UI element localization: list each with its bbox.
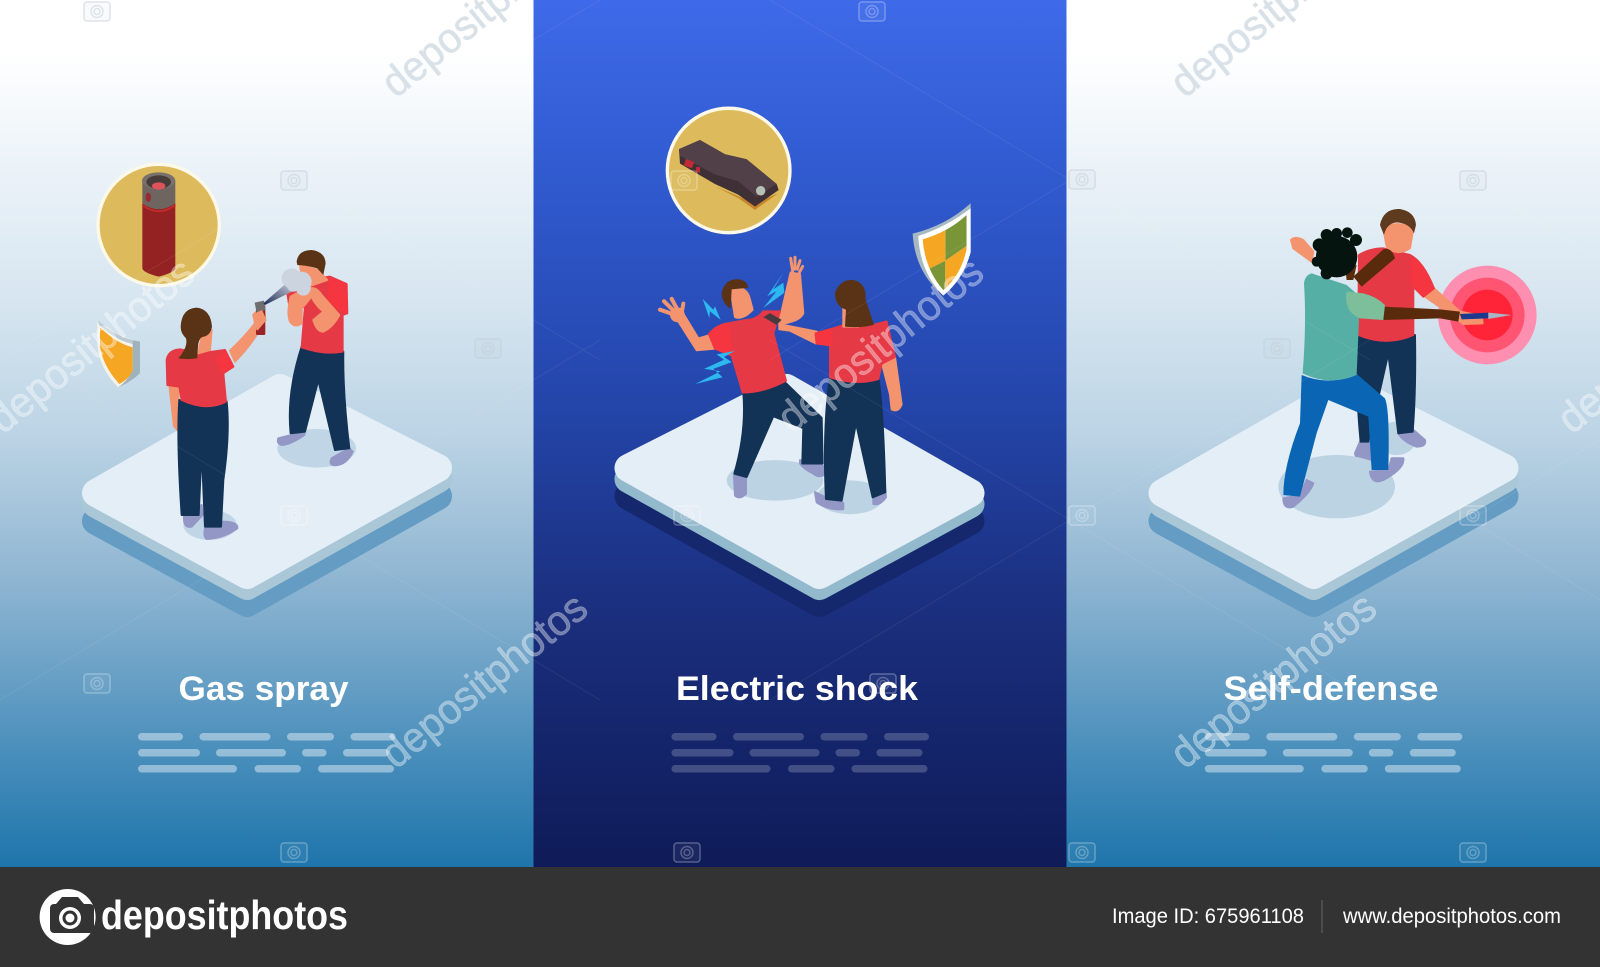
watermark overlay: depositphotos	[372, 583, 596, 777]
image id: Image ID: 675961108	[1112, 905, 1304, 928]
heading: gas spray: Gas spray	[178, 670, 349, 708]
platform	[628, 388, 970, 603]
platform	[1162, 388, 1504, 603]
text placeholder lines	[1205, 733, 1462, 772]
watermark overlay: depositphotos	[768, 247, 992, 441]
footer bar	[0, 867, 1600, 967]
woman with spray	[167, 301, 265, 540]
logo: wordmark: depositphotos	[101, 892, 348, 938]
website url: www.depositphotos.com	[1342, 905, 1561, 928]
icon: knife	[1460, 313, 1512, 319]
logo: camera badge	[40, 889, 96, 945]
man defending	[1291, 209, 1483, 462]
icon: checkered shield	[913, 203, 971, 296]
woman with stun gun	[763, 280, 902, 514]
man sprayed	[263, 250, 356, 468]
heading: electric shock: Electric shock	[676, 670, 918, 708]
watermark overlay: depositphotos	[1161, 583, 1385, 777]
heading: self-defense: Self-defense	[1224, 670, 1438, 708]
panel: self-defense	[1066, 0, 1600, 867]
icon: spray can in gold circle	[98, 164, 219, 286]
panel: electric shock	[534, 0, 1066, 867]
icon: orange shield	[97, 320, 140, 387]
panel: gas spray	[0, 0, 534, 867]
attacker restrained	[1278, 227, 1460, 518]
platform	[96, 388, 438, 603]
electric shock scene	[660, 108, 971, 514]
gas spray scene	[97, 164, 356, 540]
self-defense scene	[1278, 209, 1537, 518]
man shocked	[660, 257, 826, 501]
icon: pink target	[1438, 266, 1537, 364]
icon: stun gun in gold circle	[667, 108, 790, 233]
text placeholder lines	[138, 733, 396, 772]
text placeholder lines	[672, 733, 929, 772]
